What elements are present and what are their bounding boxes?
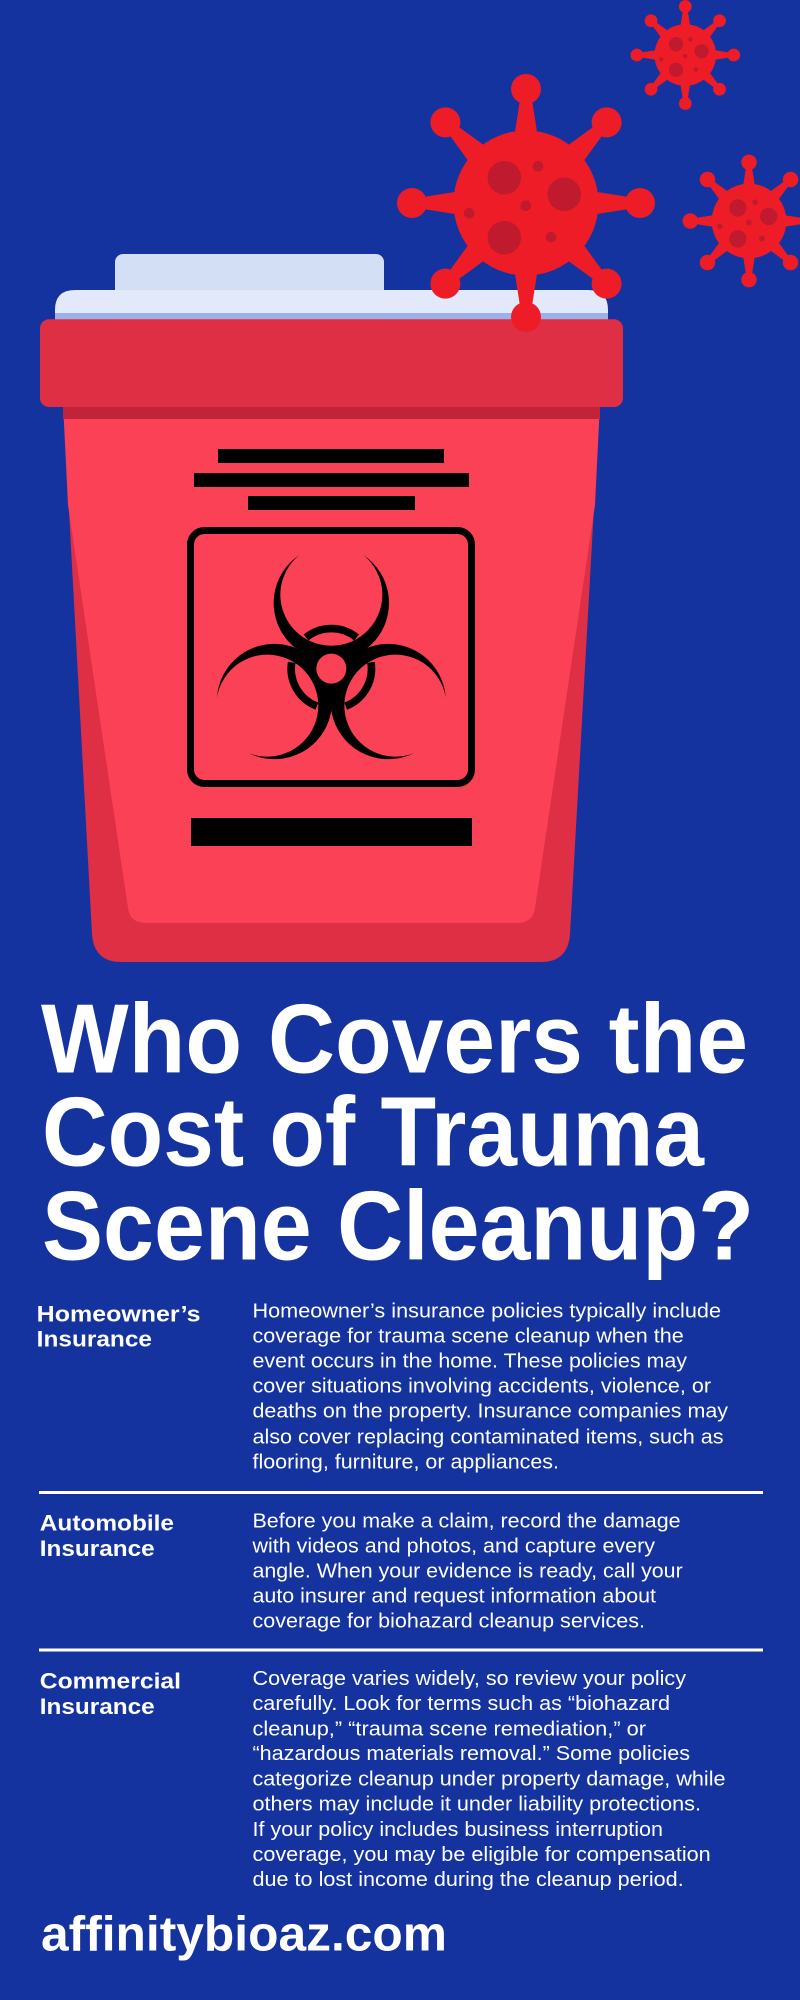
title: Cost of Trauma: [42, 1077, 705, 1187]
text: commercial insurance description: “hazardous materials removal.” Some policies: [252, 1743, 690, 1765]
container handle: [115, 254, 384, 298]
text: homeowner's insurance description: [252, 1300, 728, 1473]
text: homeowner's insurance description: flooring, furniture, or appliances.: [252, 1451, 559, 1473]
icon: large virus: [397, 74, 655, 332]
heading: commercial insurance: Commercial: [40, 1669, 181, 1694]
text: commercial insurance description: categorize cleanup under property damage, while: [252, 1768, 726, 1790]
text: commercial insurance description: [252, 1668, 726, 1891]
heading: commercial insurance: [40, 1669, 181, 1719]
text: automobile insurance description: coverage for biohazard cleanup services.: [252, 1610, 645, 1632]
text: automobile insurance description: auto insurer and request information about: [252, 1585, 656, 1607]
text: homeowner's insurance description: also cover replacing contaminated items, such as: [252, 1426, 724, 1448]
text: commercial insurance description: If your policy includes business interruption: [252, 1819, 663, 1841]
section: homeowner's insurance: [37, 1300, 728, 1473]
label frame: [190, 530, 472, 784]
illustration: biohazard sharps container: [40, 254, 623, 962]
heading: homeowner's insurance: Insurance: [37, 1327, 152, 1352]
heading: commercial insurance: Insurance: [40, 1694, 155, 1719]
heading: homeowner's insurance: [37, 1301, 201, 1352]
title: Who Covers the: [41, 984, 748, 1094]
icon: medium virus right: [683, 155, 800, 287]
heading: automobile insurance: Insurance: [40, 1536, 155, 1561]
text: commercial insurance description: due to lost income during the cleanup period.: [252, 1869, 684, 1891]
heading: homeowner's insurance: Homeowner’s: [37, 1301, 201, 1326]
container body: [63, 400, 600, 962]
text: commercial insurance description: Coverage varies widely, so review your policy: [252, 1668, 686, 1690]
text: commercial insurance description: others may include it under liability protections.: [252, 1794, 701, 1816]
label bar bottom: [191, 818, 472, 846]
section: commercial insurance: [40, 1668, 726, 1891]
text: homeowner's insurance description: coverage for trauma scene cleanup when the: [252, 1326, 684, 1348]
footer website url: affinitybioaz.com: [41, 1908, 447, 1962]
text: automobile insurance description: [251, 1511, 683, 1632]
container red lid band: [40, 319, 623, 407]
text: homeowner's insurance description: cover situations involving accidents, violence, or: [252, 1376, 711, 1398]
text: automobile insurance description: with videos and photos, and capture every: [251, 1535, 655, 1557]
container white lid: [55, 290, 608, 325]
text: homeowner's insurance description: Homeowner’s insurance policies typically include: [252, 1300, 721, 1322]
text: commercial insurance description: coverage, you may be eligible for compensation: [252, 1844, 711, 1866]
title: [41, 984, 754, 1280]
title: Scene Cleanup?: [42, 1170, 754, 1280]
text: homeowner's insurance description: deaths on the property. Insurance companies may: [252, 1401, 728, 1423]
text: automobile insurance description: Before you make a claim, record the damage: [252, 1511, 681, 1533]
icon: biohazard symbol: [204, 555, 459, 775]
heading: automobile insurance: Automobile: [40, 1511, 174, 1536]
text: automobile insurance description: angle. When your evidence is ready, call your: [252, 1560, 683, 1582]
label bars top: [194, 449, 469, 510]
text: homeowner's insurance description: event occurs in the home. These policies may: [252, 1350, 687, 1372]
text: commercial insurance description: cleanup,” “trauma scene remediation,” or: [252, 1718, 646, 1740]
text: commercial insurance description: carefully. Look for terms such as “biohazard: [252, 1693, 670, 1715]
section: automobile insurance: [40, 1511, 683, 1632]
icon: small virus top right: [630, 0, 740, 110]
heading: automobile insurance: [40, 1511, 174, 1561]
